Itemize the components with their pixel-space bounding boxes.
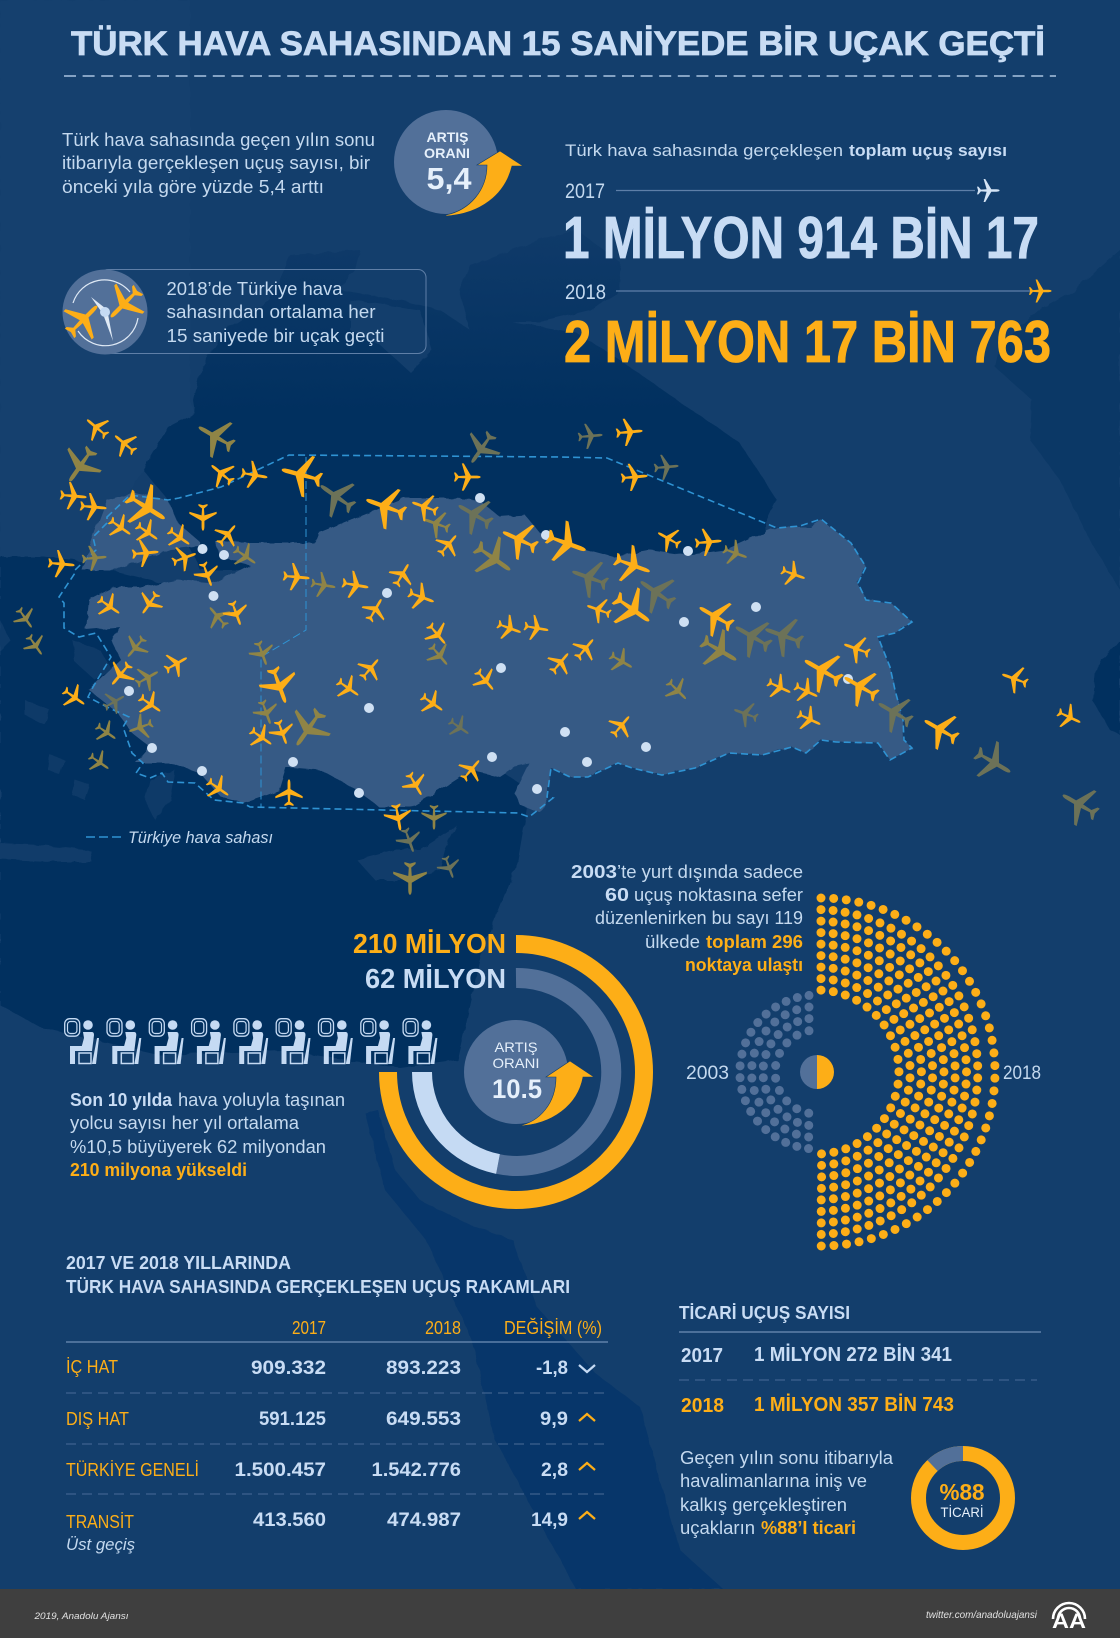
text block: increase summary: önceki yıla göre yüzde 5,4 arttı <box>62 177 324 197</box>
text block: flight destinations <box>571 862 803 975</box>
text block: commercial share: %88’I ticari <box>761 1518 856 1538</box>
2003 dots <box>740 995 809 1149</box>
table: flight figures: 2018 <box>425 1318 461 1338</box>
table: flight figures <box>66 1317 608 1554</box>
row: dış hat: 591.125 <box>259 1409 326 1430</box>
map: Turkish airspace dashed boundary <box>59 455 912 817</box>
text block: commercial share: Geçen yılın sonu itibarıyla <box>680 1448 894 1468</box>
panel: total flights 2017 and 2018: 2018 <box>565 281 606 304</box>
text block: passengers summary: hava yoluyla taşınan <box>178 1090 345 1110</box>
text block: commercial share: uçakların <box>680 1518 755 1538</box>
chart: passengers radial rings: 210 MİLYON <box>353 928 506 959</box>
badge: artış oranı 10.5 <box>464 1020 594 1126</box>
table: flight figures: 2017 <box>292 1318 326 1338</box>
table heading: 2017 VE 2018 YILLARINDA <box>66 1253 291 1273</box>
callout: every 15 seconds <box>55 270 426 354</box>
chart: destinations dot fans 2003 vs 2018: 2018 <box>1003 1063 1041 1084</box>
title: TÜRK HAVA SAHASINDAN 15 SANİYEDE BİR UÇAK GEÇTİ <box>71 25 1045 63</box>
row: transit: 14,9 <box>531 1510 568 1531</box>
row: transit: TRANSİT <box>66 1512 134 1532</box>
callout: every 15 seconds: 15 saniyede bir uçak geçti <box>166 326 384 346</box>
text block: flight destinations: ’te yurt dışında sadece <box>617 862 803 882</box>
badge: artış oranı 10.5: 10.5 <box>492 1074 542 1104</box>
row: iç hat: 909.332 <box>251 1358 326 1379</box>
badge: artış oranı 5,4: ARTIŞ <box>426 129 468 145</box>
map: airport dots <box>124 493 853 798</box>
row: transit <box>66 1510 595 1554</box>
badge: artış oranı 5,4: ORANI <box>424 145 470 161</box>
row: iç hat <box>66 1357 595 1379</box>
text block: flight destinations: 2003 <box>571 862 617 882</box>
panel: commercial flights <box>679 1303 1041 1417</box>
chart: destinations dot fans 2003 vs 2018: 2003 <box>686 1063 729 1084</box>
row: dış hat: DIŞ HAT <box>66 1409 129 1429</box>
legend: Türkiye hava sahası: Türkiye hava sahası <box>128 828 273 847</box>
table: flight figures: DEĞİŞİM (%) <box>504 1317 602 1338</box>
row: türkiye geneli: 1.500.457 <box>234 1460 326 1481</box>
row: dış hat <box>66 1409 595 1430</box>
text block: commercial share: havalimanlarına iniş ve <box>680 1471 867 1491</box>
text block: flight destinations: düzenlenirken bu sayı 119 <box>595 908 803 928</box>
badge: artış oranı 10.5: ORANI <box>492 1055 540 1071</box>
chart: 88 percent donut: TİCARİ <box>940 1503 984 1520</box>
row: türkiye geneli: TÜRKİYE GENELİ <box>66 1460 199 1480</box>
text block: passengers summary: yolcu sayısı her yıl ortalama <box>70 1113 300 1133</box>
panel: commercial flights: 2018 <box>681 1395 724 1417</box>
logo: AA <box>1052 1603 1086 1633</box>
row: iç hat: -1,8 <box>536 1358 568 1379</box>
footer bar <box>0 1589 1120 1638</box>
text block: increase summary <box>62 130 375 197</box>
text block: flight destinations: noktaya ulaştı <box>685 955 803 975</box>
text block: flight destinations: ülkede <box>645 932 700 952</box>
text block: passengers summary: %10,5 büyüyerek 62 milyondan <box>70 1137 326 1157</box>
badge: artış oranı 5,4 <box>394 110 523 216</box>
badge: artış oranı 5,4: 5,4 <box>426 161 472 196</box>
footer bar: twitter.com/anadoluajansi <box>926 1609 1038 1621</box>
text block: passengers summary: 210 milyona yükseldi <box>70 1160 247 1180</box>
text block: flight destinations: toplam 296 <box>706 932 803 952</box>
chart: destinations dot fans 2003 vs 2018 <box>686 898 1041 1246</box>
row: transit: 474.987 <box>387 1510 461 1531</box>
text block: commercial share: kalkış gerçekleştiren <box>680 1495 847 1515</box>
logo: AA: AA <box>1052 1610 1086 1633</box>
icons: row of seated passengers <box>65 1019 437 1064</box>
table heading: TÜRK HAVA SAHASINDA GERÇEKLEŞEN UÇUŞ RAKAMLARI <box>66 1277 570 1297</box>
panel: total flights 2017 and 2018: toplam uçuş sayısı <box>849 141 1007 160</box>
2018 dots <box>821 898 995 1246</box>
table heading <box>66 1253 570 1297</box>
row: türkiye geneli: 2,8 <box>541 1460 568 1481</box>
panel: total flights 2017 and 2018: 2017 <box>565 180 605 203</box>
text block: increase summary: itibarıyla gerçekleşen uçuş sayısı, bir <box>62 153 370 173</box>
text block: passengers summary: Son 10 yılda <box>70 1090 173 1110</box>
panel: total flights 2017 and 2018 <box>563 141 1052 375</box>
text block: passengers summary <box>70 1090 345 1180</box>
panel: commercial flights: 1 MİLYON 272 BİN 341 <box>754 1343 952 1366</box>
icon: clock with aeroplanes <box>55 270 153 354</box>
map: Turkey landmass <box>82 493 912 813</box>
chart: passengers radial rings <box>353 928 644 1200</box>
callout: every 15 seconds: sahasından ortalama her <box>166 302 376 322</box>
map: aeroplanes in flight <box>9 410 1106 895</box>
text block: flight destinations: 60 <box>605 885 629 905</box>
centre half circles <box>800 1055 834 1089</box>
panel: commercial flights: 2017 <box>681 1345 723 1367</box>
footer bar: 2019, Anadolu Ajansı <box>33 1611 129 1622</box>
chart: 88 percent donut <box>918 1454 1008 1542</box>
badge: artış oranı 10.5: ARTIŞ <box>494 1039 538 1055</box>
row: dış hat: 9,9 <box>540 1409 568 1430</box>
text block: flight destinations: uçuş noktasına sefer <box>634 885 803 905</box>
text block: commercial share <box>680 1448 894 1538</box>
row: iç hat: 893.223 <box>386 1358 461 1379</box>
chart: 88 percent donut: %88 <box>940 1479 985 1505</box>
chart: passengers radial rings: 62 MİLYON <box>365 963 506 994</box>
panel: commercial flights: 1 MİLYON 357 BİN 743 <box>754 1393 954 1416</box>
row: transit: 413.560 <box>253 1510 326 1531</box>
row: transit: Üst geçiş <box>66 1535 135 1554</box>
row: iç hat: İÇ HAT <box>66 1357 118 1377</box>
row: dış hat: 649.553 <box>386 1409 461 1430</box>
row: türkiye geneli <box>66 1460 595 1481</box>
callout: every 15 seconds: 2018’de Türkiye hava <box>166 279 343 299</box>
panel: commercial flights: TİCARİ UÇUŞ SAYISI <box>679 1303 850 1323</box>
row: türkiye geneli: 1.542.776 <box>372 1460 461 1481</box>
text block: increase summary: Türk hava sahasında geçen yılın sonu <box>62 130 375 150</box>
panel: total flights 2017 and 2018: Türk hava sahasında gerçekleşen <box>565 141 843 160</box>
icon: rising arrow <box>446 151 523 216</box>
